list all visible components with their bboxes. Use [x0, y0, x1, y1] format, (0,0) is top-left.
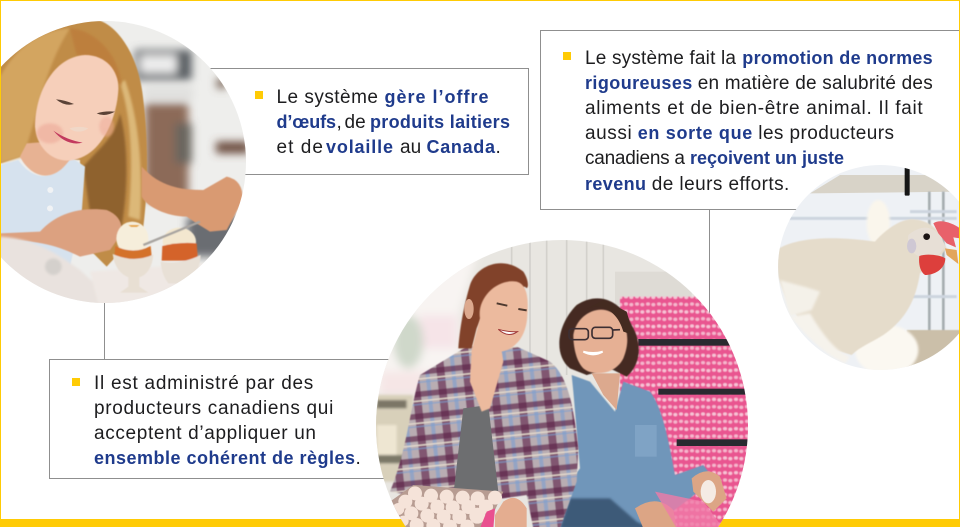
photo: white hen — [770, 160, 960, 375]
text: standards: de leurs efforts. — [652, 174, 789, 195]
text: standards: aliments et de bien-être animal. Il fait — [585, 98, 923, 119]
photo: girl eating a boiled egg — [0, 17, 253, 310]
text: standards: en matière de salubrité des — [698, 73, 933, 94]
text: standards: Le système fait la — [585, 48, 736, 69]
text: standards: promotion de normes — [742, 48, 933, 68]
woman 2 denim shirt — [560, 375, 713, 527]
fence — [780, 192, 960, 373]
text: standards: rigoureuses — [585, 73, 692, 93]
bullet — [563, 52, 571, 60]
text: supply management: . — [496, 137, 501, 158]
text: supply management — [276, 87, 510, 158]
woman 2 hair — [559, 298, 639, 377]
text: supply management: de — [344, 112, 366, 133]
window — [379, 262, 475, 394]
text: supply management: Le système — [276, 87, 378, 108]
text: producers: ensemble cohérent de règles — [94, 448, 355, 468]
hen head — [908, 228, 945, 257]
right arm — [142, 167, 243, 232]
text: standards: en sorte que — [638, 123, 752, 143]
woman 1 grey tee — [453, 405, 498, 495]
text: producers — [94, 373, 361, 469]
text: standards: revenu — [585, 174, 646, 194]
text: standards: canadiens a — [585, 148, 685, 169]
text: supply management: volaille — [326, 137, 393, 157]
hen body — [777, 219, 947, 355]
text: supply management: et de — [276, 137, 323, 158]
barn beam — [810, 175, 960, 193]
text: standards — [585, 48, 933, 195]
photo: two women egg farmers — [370, 235, 760, 527]
panel: standards — [540, 30, 960, 210]
text: supply management: Canada — [426, 137, 496, 157]
text: producers: . — [356, 448, 361, 469]
woman 2 neck — [592, 373, 620, 410]
text: standards: les producteurs — [758, 123, 894, 144]
woman 2 glasses — [569, 327, 620, 340]
woman 1 hair — [458, 263, 528, 348]
left arm — [0, 209, 122, 257]
shirt — [0, 157, 85, 267]
hen comb — [933, 221, 960, 247]
wall planks — [512, 235, 603, 375]
text: supply management: au — [400, 137, 421, 158]
connector: girl photo to lower left box — [104, 300, 105, 360]
text: standards: reçoivent un juste — [690, 148, 844, 168]
text: supply management: produits laitiers — [370, 112, 510, 132]
text: supply management: , — [336, 112, 342, 133]
woman 1 face and neck — [470, 281, 528, 412]
text: supply management: gère l’offre — [384, 87, 488, 107]
woman 1 hand — [495, 498, 527, 527]
egg flats on racks — [620, 297, 760, 527]
connector: upper right box to women photo — [709, 209, 710, 319]
egg tray — [390, 485, 503, 527]
hen behind — [855, 200, 918, 375]
neck and face — [20, 140, 72, 176]
panel: producers — [49, 359, 394, 479]
hair — [0, 21, 147, 267]
woman 2 face — [573, 310, 627, 373]
text: producers: Il est administré par des — [94, 373, 313, 394]
text: producers: producteurs canadiens qui — [94, 398, 333, 419]
yellow bottom bar — [0, 519, 960, 527]
woman 2 hands and egg — [692, 471, 727, 512]
bullet — [72, 378, 80, 386]
panel: supply management — [205, 68, 529, 175]
text: producers: acceptent d’appliquer un — [94, 423, 316, 444]
hen beak — [945, 248, 958, 264]
text: supply management: d’œufs — [276, 112, 336, 132]
bullet — [255, 91, 263, 99]
icon: egg cups and eggs — [113, 222, 201, 293]
woman 1 plaid shirt — [390, 347, 578, 527]
machine — [376, 394, 414, 482]
text: standards: aussi — [585, 123, 632, 144]
woman 2 smile — [583, 352, 603, 354]
hen wattle — [919, 255, 945, 275]
table — [1, 235, 174, 303]
